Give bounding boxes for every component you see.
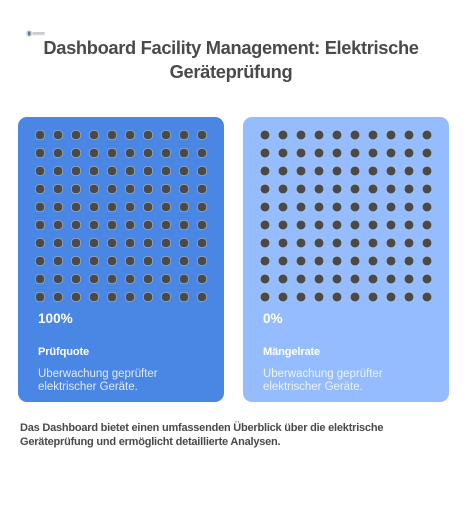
logo — [26, 30, 44, 37]
description — [263, 368, 383, 393]
panel: Mängelrate — [243, 117, 449, 402]
summary text: Geräteprüfung und ermöglicht detaillierte Analysen. — [20, 436, 280, 448]
title: Geräteprüfung — [170, 61, 292, 82]
summary text: Das Dashboard bietet einen umfassenden Überblick über die elektrische — [20, 422, 383, 434]
panel: Prüfquote — [18, 117, 224, 402]
title: Dashboard Facility Management: Elektrische — [43, 37, 419, 58]
description — [38, 368, 158, 393]
description: elektrischer Geräte. — [263, 381, 363, 393]
value: 0%: 0% — [263, 310, 283, 326]
label: Prüfquote: Prüfquote — [38, 346, 89, 358]
value: 100%: 100% — [38, 310, 73, 326]
dot grid: Mängelrate — [260, 130, 432, 302]
description: Überwachung geprüfter — [263, 368, 383, 380]
label: Mängelrate: Mängelrate — [263, 346, 320, 358]
description: elektrischer Geräte. — [38, 381, 138, 393]
description: Überwachung geprüfter — [38, 368, 158, 380]
dot grid: Prüfquote — [35, 130, 207, 302]
summary text — [20, 421, 384, 448]
title — [43, 37, 419, 82]
